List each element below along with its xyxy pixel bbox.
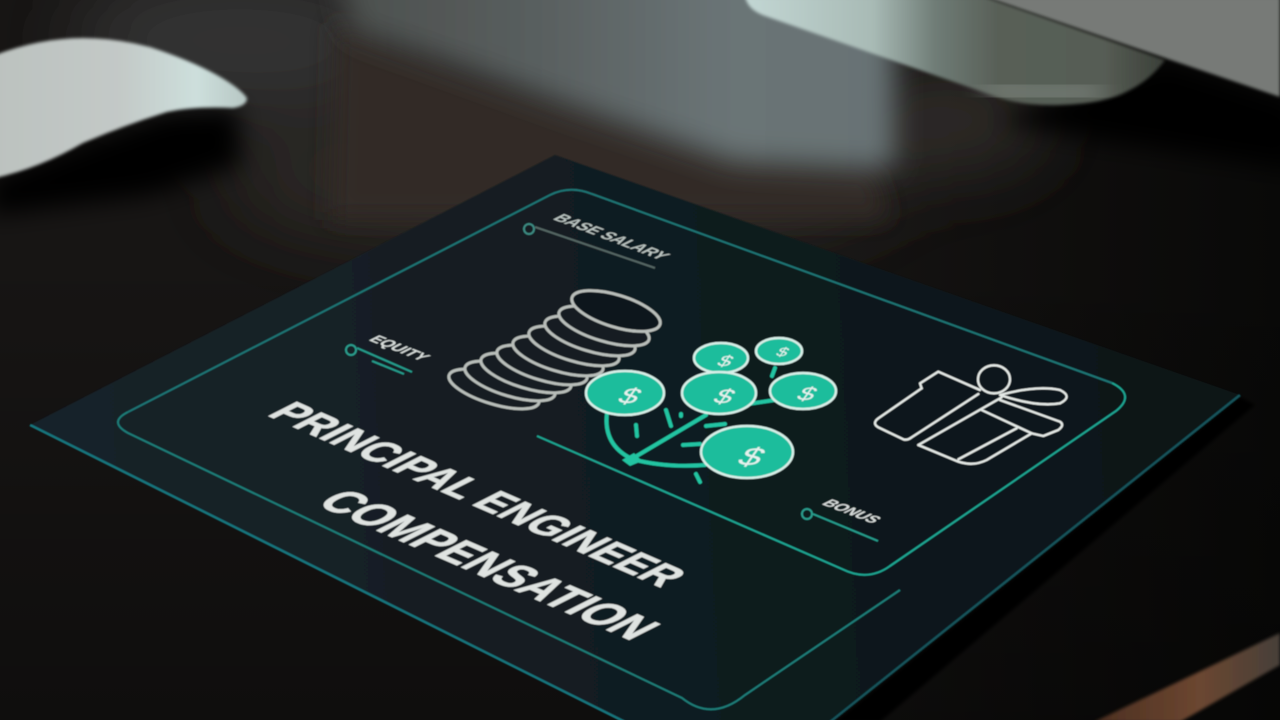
label: equity <box>346 333 434 374</box>
mouse <box>0 38 247 215</box>
label: base salary: BASE SALARY <box>548 212 675 262</box>
icon: money tree <box>586 338 836 482</box>
label: bonus <box>802 497 886 541</box>
dollar signs: $ <box>792 384 822 405</box>
label: equity: EQUITY <box>364 333 434 363</box>
title: PRINCIPAL ENGINEER <box>256 397 697 593</box>
dollar signs <box>612 345 822 471</box>
title: COMPENSATION <box>305 484 672 646</box>
dollar signs: $ <box>708 385 741 408</box>
monitor stand <box>745 0 1280 170</box>
icon: gift box <box>875 365 1067 464</box>
lower panel border <box>118 412 900 709</box>
dollar signs: $ <box>731 443 772 471</box>
icon: coin stack <box>445 282 665 417</box>
pen <box>1094 633 1280 720</box>
card <box>30 155 1255 720</box>
dollar signs: $ <box>773 345 794 359</box>
coins <box>586 338 836 478</box>
dollar signs: $ <box>612 384 648 409</box>
panel border <box>128 190 1125 575</box>
label: bonus: BONUS <box>817 497 886 525</box>
dollar signs: $ <box>713 353 738 370</box>
